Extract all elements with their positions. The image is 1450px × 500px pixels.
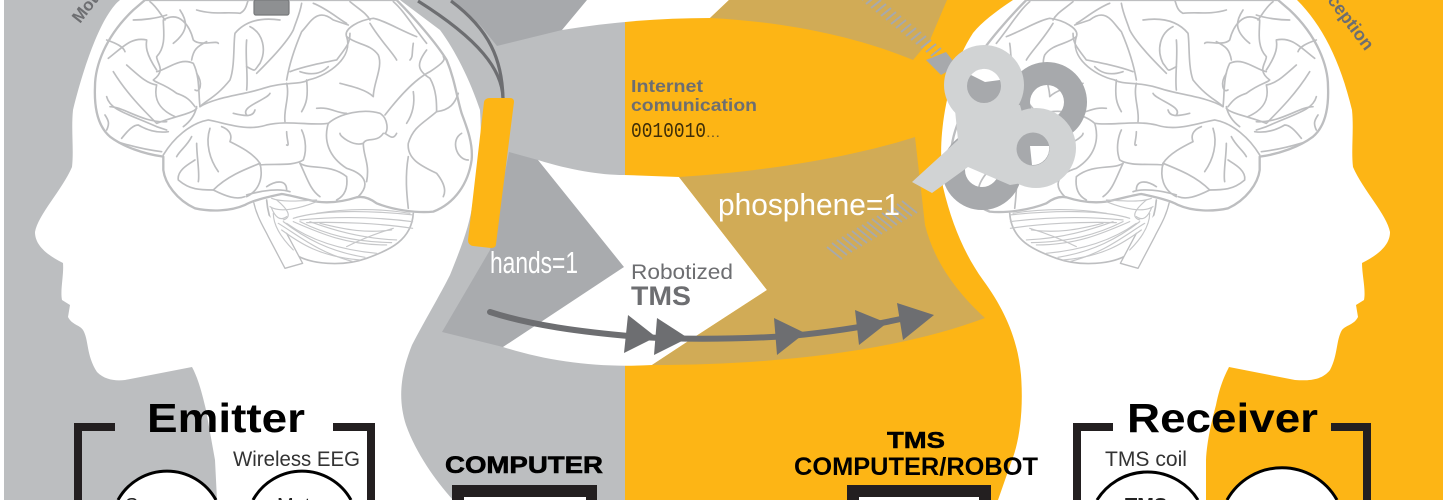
panel: TMS COMPUTER/ROBOT: COMPUTER/ROBOT — [794, 453, 1038, 481]
panel: Receiver: TMS coil — [1105, 448, 1187, 471]
brain: receiver — [951, 0, 1328, 268]
EEG cables — [418, 1, 503, 98]
tan wedge: phosphene — [652, 137, 985, 365]
yellow wireless EEG bar — [468, 98, 514, 248]
hatching lower — [827, 201, 917, 259]
background: receiver yellow half — [625, 0, 1443, 500]
dark grey wedge top — [450, 0, 587, 46]
right head silhouette — [941, 0, 1390, 500]
label: Internet communication: comunication — [631, 95, 757, 115]
white wedge top — [562, 0, 729, 30]
label: Internet communication: 0010010 — [631, 121, 706, 144]
label: Internet communication — [631, 76, 757, 144]
left head silhouette — [35, 0, 481, 500]
dark grey triangle: emitter signal — [442, 152, 624, 347]
background: emitter grey half — [4, 0, 625, 500]
panel: COMPUTER — [445, 452, 603, 500]
label: Internet communication: ... — [706, 124, 720, 140]
panel: TMS COMPUTER/ROBOT: TMS — [887, 427, 945, 453]
EEG electrode on emitter brain — [254, 0, 289, 15]
brain: emitter — [95, 0, 472, 268]
label: phosphene=1: phosphene=1 — [718, 187, 900, 222]
label: hands=1: hands=1 — [490, 245, 578, 280]
panel: Receiver: Receiver — [1127, 395, 1318, 441]
white wedge centre — [503, 160, 767, 366]
panel: Emitter: Emitter — [147, 395, 305, 441]
panel: Receiver — [1077, 395, 1367, 500]
arrow: signal flow — [490, 303, 934, 355]
panel: COMPUTER: COMPUTER — [445, 452, 603, 479]
hatching top — [862, 0, 941, 56]
grey connector to coil — [926, 52, 957, 75]
TMS coil — [912, 45, 1087, 210]
panel: Emitter — [78, 395, 371, 500]
panel: TMS COMPUTER/ROBOT — [794, 427, 1038, 500]
label: Robotized TMS — [631, 261, 733, 311]
label: Robotized TMS: Robotized — [631, 261, 733, 284]
panel: Emitter: Wireless EEG — [233, 448, 360, 471]
tan wedge top — [710, 0, 947, 60]
label: Robotized TMS: TMS — [631, 281, 691, 311]
label: Internet communication: Internet — [631, 76, 703, 96]
